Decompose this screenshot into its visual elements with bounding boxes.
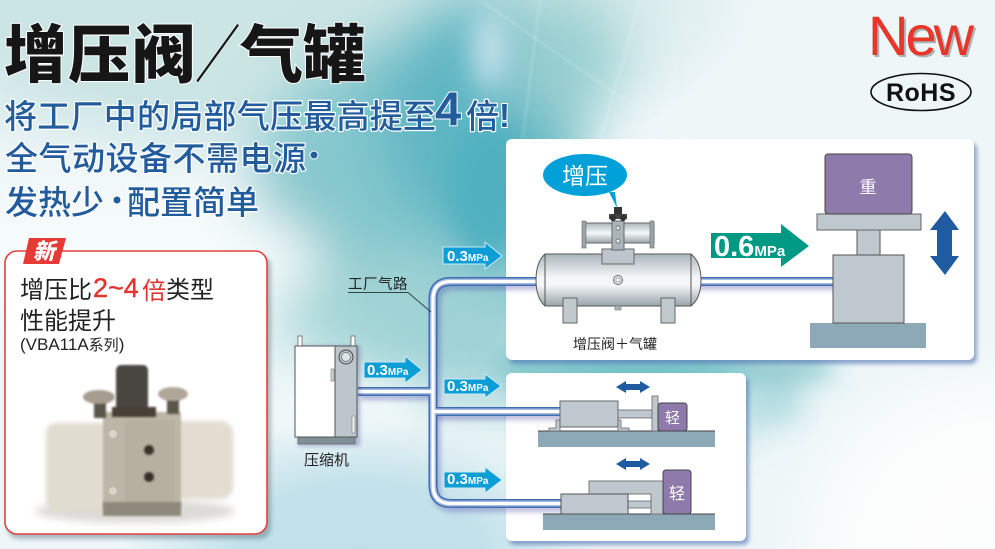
subtitle: 全气动设备不需电源: [5, 132, 306, 180]
subtitle: !: [499, 97, 510, 134]
light load 2: 轻: [669, 480, 685, 504]
arrow: 0.6MPa: 0.6MPa: [714, 231, 786, 263]
pipes: factory air line: [358, 282, 836, 508]
card text: 2~4: [93, 273, 139, 303]
panel: high pressure circuit: [506, 139, 977, 364]
title: [4, 4, 366, 96]
heavy load: 重: [860, 173, 876, 198]
heavy load cylinder: [810, 154, 926, 348]
arrow: 0.3MPa bottom: [444, 467, 502, 493]
light load 2: [663, 470, 691, 514]
arrow: 0.3MPa top: 0.3MPa: [447, 248, 489, 265]
subtitle: 4: [435, 82, 461, 135]
RoHS mark: RoHS: [886, 79, 956, 107]
compressor label: 压缩机: [304, 449, 349, 470]
booster tank: [536, 207, 701, 354]
arrow: 0.3MPa compressor: 0.3MPa: [367, 362, 409, 379]
light load actuator 1: [538, 396, 715, 447]
arrow: light load 1 motion: [616, 381, 650, 393]
new badge: New: [870, 6, 977, 69]
tank caption: 增压阀＋气罐: [573, 334, 657, 354]
light load 1: 轻: [665, 407, 680, 428]
arrow: 0.3MPa middle: 0.3MPa: [447, 378, 489, 395]
valve photo: [35, 365, 235, 523]
heavy load: [825, 154, 912, 214]
arrow: vertical motion: [930, 211, 959, 275]
RoHS mark: [871, 74, 971, 110]
card text: 倍: [142, 271, 166, 306]
card text: (VBA11A系列): [20, 334, 124, 355]
callout: boost: [543, 154, 627, 208]
arrow: 0.6MPa: [711, 224, 809, 267]
title: 气罐: [240, 5, 366, 96]
title: 增压阀: [4, 5, 195, 96]
new tag: [23, 234, 66, 266]
subtitle: 配置简单: [127, 176, 259, 224]
arrow: 0.3MPa top: [443, 242, 502, 269]
callout: boost: 增压: [562, 157, 608, 191]
card text: 性能提升: [20, 301, 116, 336]
label: factory air line: [348, 273, 431, 312]
light load actuator 2: [543, 470, 715, 530]
booster valve: [582, 207, 654, 264]
label: factory air line: 工厂气路: [348, 273, 408, 294]
card text: 增压比: [20, 270, 92, 305]
compressor: [295, 336, 360, 470]
card text: [20, 270, 214, 355]
new tag: 新: [33, 234, 59, 266]
new badge: New: [868, 4, 975, 67]
subtitle: 倍: [466, 90, 499, 138]
arrow: 0.3MPa middle: [444, 374, 501, 398]
subtitle: 将工厂中的局部气压最高提至: [4, 90, 436, 138]
subtitle: [4, 82, 510, 224]
arrow: 0.3MPa compressor: [364, 356, 422, 383]
card text: 类型: [166, 270, 214, 305]
panel: new type card: [5, 234, 271, 539]
subtitle: 发热少: [5, 176, 104, 224]
panel: low pressure circuit: [506, 373, 749, 545]
arrow: light load 2 motion: [616, 458, 650, 470]
arrow: 0.3MPa bottom: 0.3MPa: [447, 471, 489, 488]
light load 1: [658, 403, 687, 431]
title: ／: [195, 4, 240, 95]
